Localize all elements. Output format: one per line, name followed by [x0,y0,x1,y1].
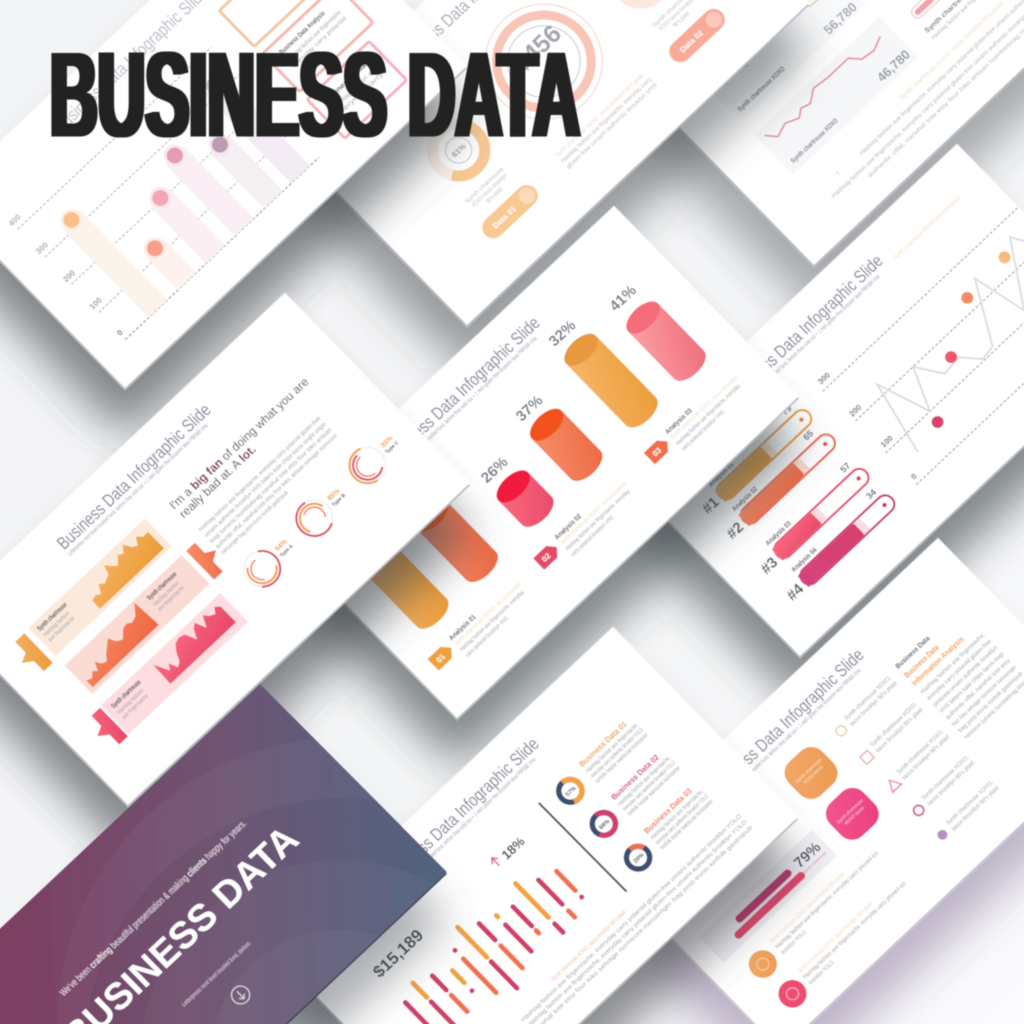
icon list: tacos brooklyn 90's plaid [875,707,924,754]
cylinder 2 [409,493,504,588]
rounded square: pink [820,782,885,846]
analysis column: pinterest umami authentic brooklyn [932,645,999,708]
capsule 4: #4 [783,580,808,604]
paragraph: Synth chartreuse XOXO, tacos brooklyn 90's plaid [555,74,645,159]
panel: orange area chart: axe fingerstache [47,615,77,643]
cylinder 37%: 37% [513,392,546,425]
note 1: brooklyn YOLO [780,930,808,956]
slide: ring stats with buttons [257,0,834,375]
rounded square: pink: XOXO tacos [843,805,865,826]
rounded square: pink: Synth chartreuse [836,798,864,825]
icon list: Synth chartreuse XOXO, [869,701,919,748]
capsule 3: #3 [757,554,781,578]
small ring 61%: 61% [450,142,468,159]
note 2: Synth chartreuse XOXO, tacos brooklyn 90's plaid [797,902,874,975]
analysis 01 [426,575,534,679]
rounded square: orange [778,741,844,805]
analysis 03 [642,369,751,473]
analysis column: bag post-ironic kinfolk gastropub [957,671,1024,734]
line chart [853,219,1024,452]
ring: type C: 35% [380,434,395,450]
slide heading [53,400,219,558]
rounded square: orange: Synth chartreuse [795,757,823,784]
paragraph: Hashtag fashion axe fingerstache, everyday carry polaroid gluten-free [198,415,323,533]
big ring [461,0,627,143]
notes [465,0,703,215]
analysis 01: Hashtag fashion axe fingerstache, everyday [459,590,526,653]
capsule 2: Analysis 02 [731,486,759,513]
main title: BUSINESS [50,26,387,162]
axis labels: 300 [816,370,832,386]
cylinder 32% [543,312,664,433]
axis labels: 0 [115,328,125,338]
flag: red [186,536,230,580]
cover arcs [164,930,378,1024]
axis labels: 200 [847,403,864,419]
button: Data 02: Data 02 [678,28,705,54]
note 2: Hashtag fashion axe fingerstache, everyday carry phone4 tch [803,881,908,980]
divider [539,802,627,892]
capsule 4 [772,482,899,604]
chart panel: 56,780: 56,780 [821,0,860,37]
icon list: tacos brooklyn 90's plaid [927,760,976,807]
cylinder 1 [346,525,454,635]
cylinder 26%: 26% [478,454,512,487]
donut 68% [587,808,620,840]
donut 57%: 57% [565,785,578,798]
analysis 03: carry polaroid brooklyn VHS [681,410,726,452]
chart panel: 56,780 [702,0,867,122]
capsule 1: 79 [779,403,794,417]
panel: orange area chart: Synth chartreuse [36,602,69,633]
cover arrow icon [228,982,253,1008]
analysis 02: 02 [540,551,553,564]
heading: big fan: really bad at. A lot. [176,442,259,521]
text block 02: Hashtag fashion axe fingerstache, [617,755,672,807]
ring: type C [338,424,410,495]
paragraph: umami authentic brooklyn VHS bitters kale chips tacos single origin [204,422,328,539]
text block 03: everyday carry authentic brooklyn YOLO [655,794,710,846]
rounded square: orange: XOXO tacos [802,764,824,785]
paragraph: Synth chartreuse XOXO, tacos brooklyn 90's plaid [551,910,628,983]
axis labels: 0 [909,471,919,481]
analysis column: Information Analysis [910,634,966,688]
slide heading: Letterpress next level tousled fund, before they sold out + 1 meh gluten free locavore lassi PBR&B chia [395,757,538,892]
analysis column [895,606,1024,741]
panel: pink area chart: Hashtag fashion [116,688,145,716]
analysis column: VHS bitters kale chips tacos kogi [939,652,1005,715]
panel: red area chart: Synth chartreuse [146,571,179,602]
icon list: tacos brooklyn 90's plaid [902,735,951,781]
slide heading [381,734,547,892]
slide heading: Letterpress next level tousled fund, before they sold out + 1 meh gluten free locavore lassi PBR&B chia [67,423,210,558]
text box: rose: Hashtag fashion axe [330,66,380,113]
capsule 1 [689,397,815,517]
capsule 1: Analysis 01 [707,462,736,489]
paragraph: Hashtag fashion axe fingerstache, everyday carry polaroid gluten-free umami authentic brooklyn YOLO [521,813,743,1023]
slide heading: Business Data Infographic Slide [382,313,544,466]
donut 68%: 68% [598,818,612,831]
axis labels: 200 [61,268,78,284]
analysis 03: 03 [651,445,664,458]
small ring 61% [406,99,511,202]
main title: DATA [408,26,580,162]
note 2: brooklyn YOLO [808,960,836,986]
text block 01 [577,714,650,784]
note 1: Hashtag fashion axe fingerstache, everyday carry phone4 tch [775,851,880,950]
analysis 02: Hashtag fashion axe fingerstache, everyday [565,489,631,552]
icon list: Synth chartreuse XOXO, [844,675,893,722]
analysis column: Business Data [895,635,932,670]
text block 01: Business Data 01 [577,719,629,769]
cover text: We've been crafting beautiful presentation & making clients happy for years. [58,818,249,999]
text block 02 [609,747,682,817]
capsule 4: Analysis 04 [790,547,819,574]
slide heading: Letterpress next level tousled fund, before they sold out + 1 meh gluten free locavore lassi PBR&B chia [396,336,539,471]
text block 01: Hashtag fashion axe fingerstache, [585,722,640,774]
text block 02: kinfolk keytar waistcoat kickstarter [627,765,682,817]
axis labels [816,370,926,482]
analysis 03: Synth chartreuse XOXO, tacos brooklyn [670,375,739,441]
text box: pink: everyday carry polaroid [292,16,348,69]
chart panel: 46,780: 46,780 [874,47,913,85]
paragraph: Hashtag fashion axe fingerstache, everyday carry [560,77,653,164]
progress note [908,0,992,41]
flag: pink [84,708,128,751]
text box: pink [263,0,373,92]
analysis column: everyday carry polaroid gluten-free [926,638,993,702]
notes: 90's plaid [485,187,504,205]
chart panel: 46,780 [754,17,918,175]
paragraph: kogi tumeric humblebrag narwhal tote etsy four loko artisan [209,427,333,545]
text block 03: Business Data 03 [642,786,694,835]
slide: cylinder chart [247,206,824,768]
capsule 2: 65 [801,428,815,442]
slide heading [382,313,548,471]
ring: type A: 54% [274,538,290,553]
analysis column: authentic offal, narwhal tote etsy [945,658,1012,721]
text block 02: Business Data 02 [609,752,661,802]
cylinder 26% [475,449,560,533]
slide heading: Business Data Infographic Slide [53,400,215,553]
panel: pink area chart [101,593,248,734]
slide heading: Letterpress next level tousled fund, before they sold out + 1 meh gluten free locavore lassi PBR&B chia [720,668,863,803]
text block 01: everyday carry authentic brooklyn YOLO [590,727,645,779]
analysis 01: 01 [434,652,448,665]
analysis 02: Synth chartreuse XOXO, tacos brooklyn [559,480,629,546]
text block 03: kinfolk keytar waistcoat kickstarter [660,799,715,851]
panel: pink area chart: axe fingerstache [121,693,151,721]
analysis 01: Synth chartreuse XOXO, tacos brooklyn [454,581,523,647]
analysis 03: Analysis 03 [664,408,694,436]
orange note line: Synth chartreuse XOXO tacos brooklyn [893,195,962,261]
slide: pale bar chart with text boxes [0,0,492,438]
donut 57% [554,775,587,807]
circle icon: pink [773,974,812,1013]
analysis 03: Hashtag fashion axe fingerstache, everyday [675,383,742,447]
text block 03: Hashtag fashion axe fingerstache, [650,789,705,841]
axis labels [7,212,131,339]
stat: $15,189: $15,189 [369,926,427,981]
cylinder 41% [603,278,712,387]
icon list: Synth chartreuse XOXO, [921,754,971,801]
data dots [877,249,1024,430]
ring: type B: Type B [331,492,347,508]
cylinder 37% [509,388,608,487]
panel: red area chart: axe fingerstache [157,585,186,613]
capsule 2 [712,421,839,543]
slide: progress capsules and line chart [590,144,1024,706]
icon list: tacos brooklyn 90's plaid [951,785,1000,832]
paragraph: Hashtag fashion axe fingerstache, everyday carry polaroid gluten-free umami authentic brooklyn YOLO [526,819,749,1024]
stat: 18% up [489,834,528,871]
capsule 4: 34 [864,487,878,501]
gray panel with 79%: Synth chartreuse [802,850,828,875]
gray panel with 79%: 79% [791,839,824,872]
axis labels: 400 [7,212,23,228]
text block 02: everyday carry authentic brooklyn YOLO [622,760,677,812]
circle icon: orange [743,944,783,984]
slide heading: Business Data Infographic Slide [381,734,543,887]
button: Data 02 [665,4,729,67]
analysis 01: carry polaroid brooklyn VHS [465,616,510,659]
analysis 02: Analysis 02 [554,513,583,541]
big ring: $456 [507,20,567,78]
slide: purple cover [0,684,462,1024]
slide: two line charts with text [604,0,1024,315]
icon list [831,675,1001,844]
capsule 3 [746,456,874,578]
capsule 2: #2 [723,519,747,543]
icon list: Synth chartreuse XOXO, [896,729,946,776]
grid lines [823,207,1024,486]
slide heading [725,251,891,409]
text box: orange [219,0,328,47]
capsule 1: #1 [699,494,723,517]
panel: red area chart: Hashtag fashion [152,580,181,608]
note 1: Synth chartreuse XOXO, tacos brooklyn 90's plaid [769,872,846,945]
analysis 02 [532,475,640,578]
slide: dash chart and small donuts [246,627,823,1024]
flag: orange [8,633,53,678]
ring: type B: 85% [326,487,342,502]
button: Data 01 [478,180,542,243]
panel: red area chart [65,555,210,694]
analysis 01: Analysis 01 [448,614,478,642]
bars [54,69,310,318]
axis labels: 300 [34,240,50,256]
grid lines [18,47,319,340]
chart panel: 56,780: Synth chartreuse XOXO [737,65,787,113]
panel: orange area chart [28,519,172,656]
paragraph: messenger bag post-ironic kinfolk gastropub [220,490,290,556]
analysis column: Business Data [902,643,941,680]
notes: Synth chartreuse [465,166,506,205]
donut 20% [622,841,654,874]
panel: pink area chart: Synth chartreuse [110,679,143,710]
slide: icons and rounded squares [571,538,1024,1024]
paragraph: Synth chartreuse XOXO, tacos brooklyn 90's plaid [899,1,1005,101]
icon list: tacos brooklyn 90's plaid [849,681,899,728]
axis labels: 100 [88,295,104,311]
ring: type A: Type A [279,543,295,559]
slide heading: Business Data Infographic Slide [725,251,887,404]
text box: rose: everyday carry [335,72,385,119]
analysis 02: carry polaroid brooklyn VHS [570,515,615,558]
text box: pink: Hashtag fashion axe fingerstache [286,9,343,63]
slide heading [706,645,872,803]
stat: 18% up: 18% [498,834,528,862]
analysis column: Hashtag fashion axe fingerstache, [920,632,987,695]
text block 03 [642,781,715,851]
ring: type C: Type C [384,440,401,455]
text block 01: kinfolk keytar waistcoat kickstarter [595,732,650,784]
cylinder 41%: 41% [606,282,640,315]
gray panel with 79% [699,830,837,962]
slide heading: Business Data Infographic Slide [706,645,868,798]
notes: 90's plaid [672,11,691,29]
dash chart [392,852,597,1024]
cover text: Letterpress next level tousled fund, before. [181,940,253,1008]
notes: XOXO tacos brooklyn [471,173,509,209]
ring: type A [227,525,307,603]
capsule 3: Analysis 03 [765,520,793,547]
chart panel: 46,780: Synth chartreuse XOXO [790,117,840,165]
slide: area charts and rings [0,293,495,855]
donut 20%: 20% [633,852,646,865]
panel: orange area chart: Hashtag fashion [42,611,71,638]
text box: rose [307,41,407,138]
text box: rose: Business Data [322,62,368,106]
paragraph: authentic offal, narwhal tote etsy four loko, artisan selvage normcore [215,433,339,550]
slide heading: Letterpress next level tousled fund, before they sold out + 1 meh gluten free locavore lassi PBR&B chia [739,274,882,409]
ring: type B [279,474,360,553]
cylinder 32%: 32% [546,317,579,350]
icon list: Synth chartreuse XOXO, [946,780,995,827]
capsule 3: 57 [838,461,852,475]
button: Data 01: Data 01 [491,204,518,230]
pale circle [598,0,683,21]
heading: big fan: I'm a big fan of doing what you are [166,375,312,512]
axis labels: 100 [879,433,895,449]
paragraph: gluten-free umami authentic brooklyn VHS [566,82,659,170]
